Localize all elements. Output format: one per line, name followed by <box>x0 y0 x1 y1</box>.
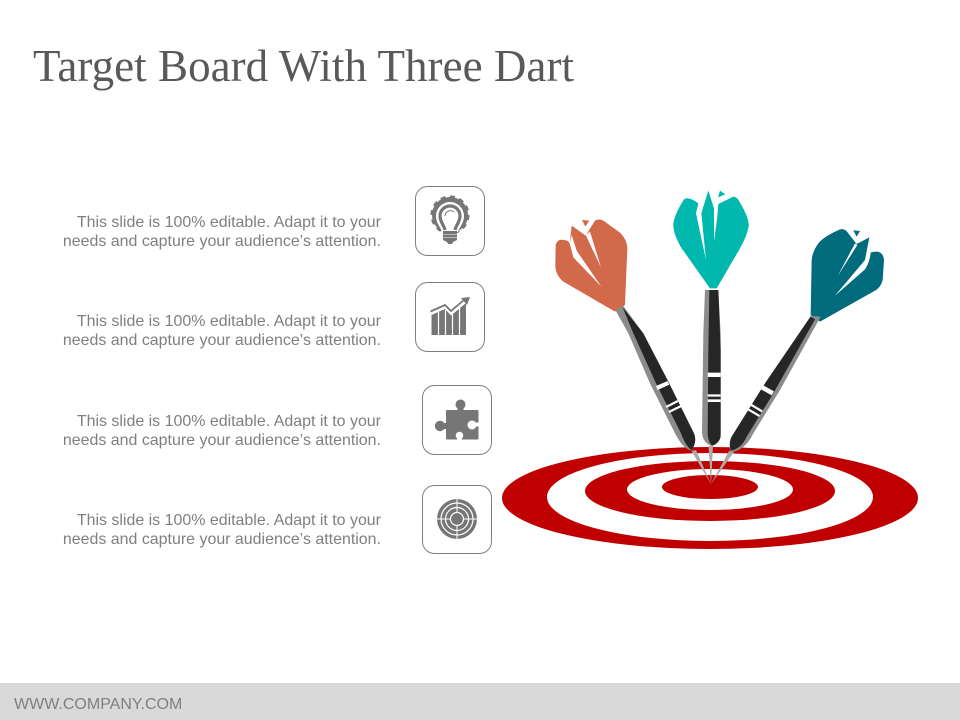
dart tip <box>711 451 734 484</box>
icon: puzzle piece <box>422 386 492 454</box>
dart tip <box>708 446 713 484</box>
text block 4: needs and capture your audience’s attention. <box>63 531 381 548</box>
footer bar <box>0 683 960 720</box>
dart barrel <box>702 290 721 446</box>
dart flight <box>811 229 884 322</box>
dart: orange left <box>555 219 711 484</box>
icon: target <box>422 486 492 554</box>
dart tip <box>692 450 711 484</box>
icon: lightbulb gear <box>416 186 484 256</box>
dart: teal centre <box>673 191 749 484</box>
text block 3: This slide is 100% editable. Adapt it to your <box>77 413 382 430</box>
text block 4: This slide is 100% editable. Adapt it to your <box>77 512 382 529</box>
text block 3 <box>63 413 382 449</box>
dart: dark teal right <box>711 229 884 484</box>
icon: growth chart <box>416 282 484 352</box>
text block 4 <box>63 512 382 548</box>
text block 2: needs and capture your audience’s attention. <box>63 332 381 349</box>
text block 2: This slide is 100% editable. Adapt it to your <box>77 313 382 330</box>
text block 1: needs and capture your audience’s attention. <box>63 233 381 250</box>
dart flight <box>555 219 627 312</box>
dart barrel <box>615 306 695 451</box>
text block 3: needs and capture your audience’s attention. <box>63 432 381 449</box>
text block 1 <box>63 214 382 250</box>
text block 1: This slide is 100% editable. Adapt it to your <box>77 214 382 231</box>
dart barrel <box>730 316 821 452</box>
target board <box>502 447 918 549</box>
footer url: WWW.COMPANY.COM <box>14 696 182 713</box>
dart flight <box>673 191 749 288</box>
title: Target Board With Three Dart <box>33 41 574 91</box>
text block 2 <box>63 313 382 349</box>
